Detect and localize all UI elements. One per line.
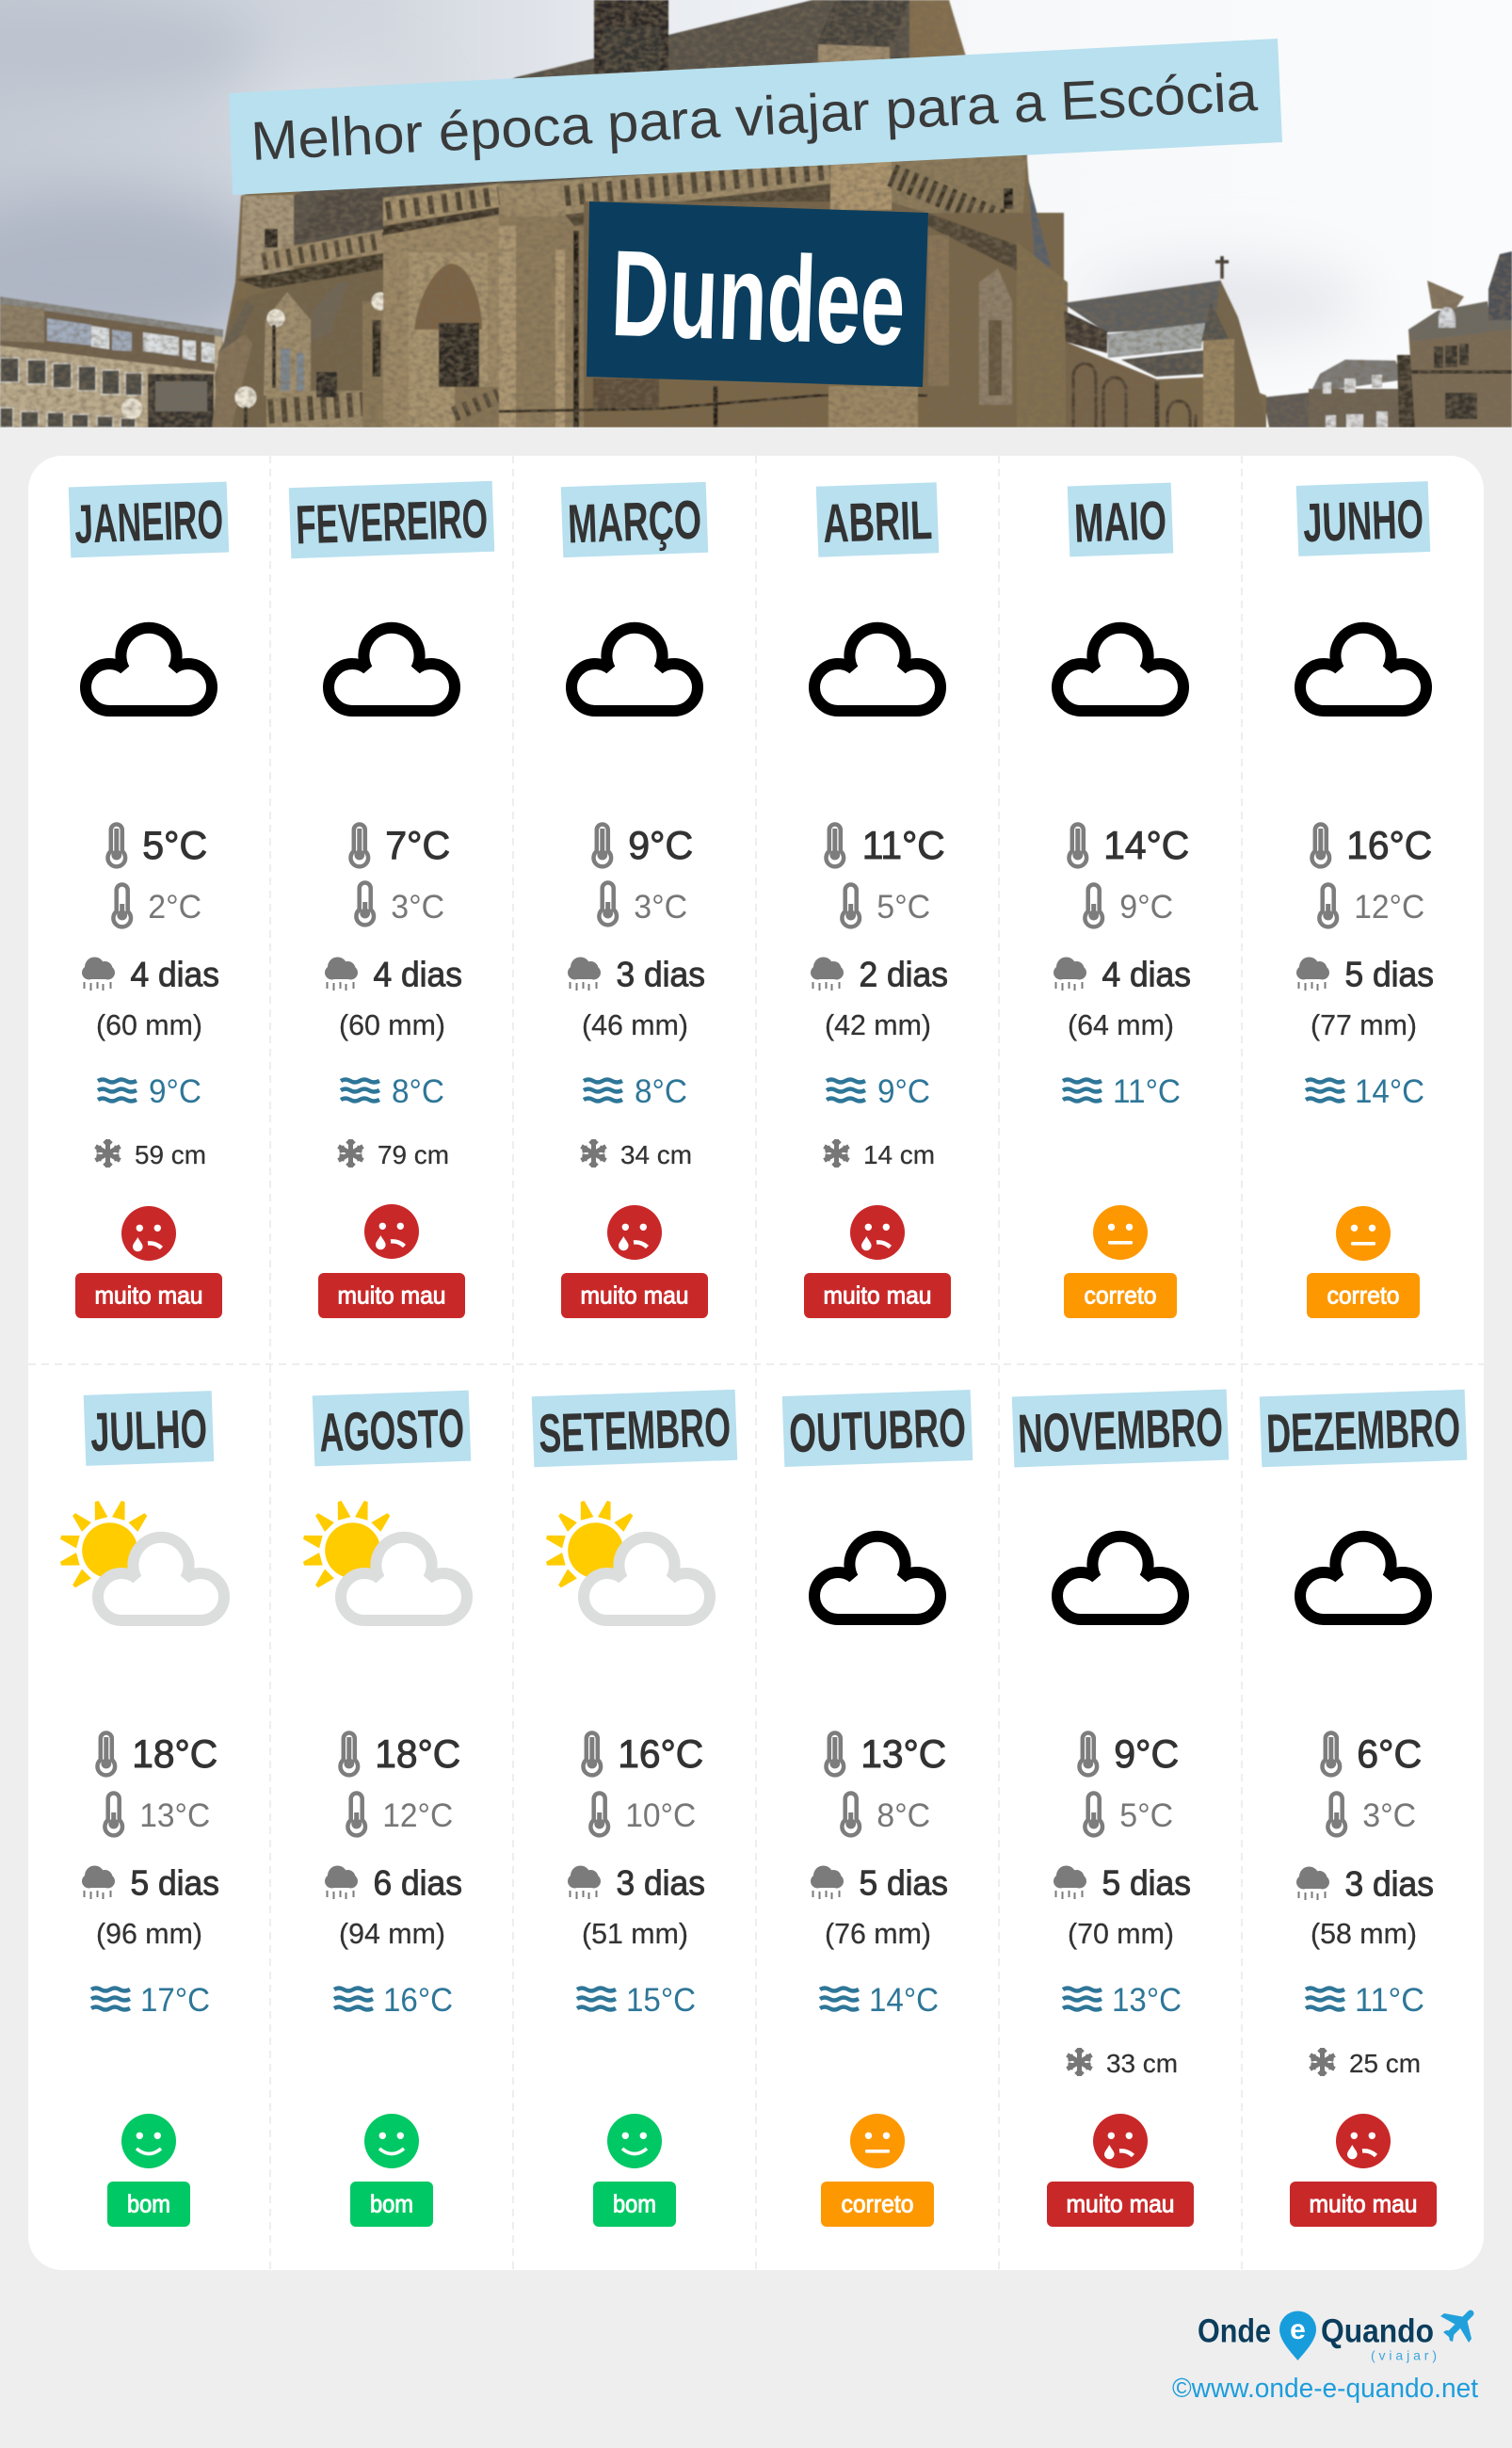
- rainfall: (76 mm): [825, 1917, 931, 1950]
- logo: Onde e Quando: Onde: [1198, 2312, 1271, 2350]
- high temperature: [1312, 823, 1432, 867]
- panel: dezembro: [1260, 1390, 1467, 2227]
- rain days: [1296, 1865, 1434, 1904]
- month label: FEVEREIRO: [295, 488, 489, 556]
- rating badge: [1064, 1273, 1177, 1318]
- month label: JUNHO: [1302, 489, 1424, 554]
- rating face: [850, 2114, 905, 2168]
- panel: janeiro: [69, 482, 229, 1318]
- rating badge: muito mau: [580, 1280, 689, 1309]
- rating face: [1336, 2114, 1391, 2168]
- panel: março: [561, 482, 708, 1318]
- city name box: Dundee: [587, 201, 928, 387]
- sea temperature: [1306, 1982, 1424, 2019]
- month label: [313, 1391, 471, 1466]
- month label: ABRIL: [822, 490, 933, 555]
- icon: map pin: e: [1290, 2314, 1306, 2345]
- high temperature: 14°C: [1103, 823, 1189, 867]
- sea temperature: [1063, 1982, 1182, 2019]
- website credit: ©www.onde-e-quando.net: [1172, 2374, 1478, 2404]
- icon: cloud: [814, 1537, 941, 1619]
- rating badge: [75, 1273, 222, 1318]
- low temperature: 5°C: [877, 889, 930, 926]
- sea temperature: [584, 1073, 687, 1110]
- month label: [1068, 483, 1173, 556]
- logo: Onde e Quando: (viajar): [1371, 2348, 1437, 2363]
- rain days: [1296, 956, 1434, 994]
- high temperature: 18°C: [375, 1731, 460, 1776]
- sea temperature: [1063, 1073, 1181, 1110]
- low temperature: [347, 1793, 453, 1835]
- sea temperature: [91, 1982, 210, 2019]
- rainfall: (42 mm): [825, 1008, 931, 1041]
- snow: 33 cm: [1106, 2049, 1178, 2078]
- rating face: [1093, 2114, 1148, 2168]
- sea temperature: 8°C: [392, 1073, 444, 1110]
- panel: abril: [804, 482, 951, 1318]
- low temperature: [1085, 885, 1173, 926]
- title banner: [229, 39, 1282, 195]
- low temperature: [599, 883, 687, 926]
- city name box: Dundee: Dundee: [609, 224, 908, 371]
- rating face: [1093, 1205, 1148, 1260]
- high temperature: [827, 823, 945, 867]
- high temperature: 18°C: [132, 1731, 217, 1776]
- rating face: [607, 2114, 662, 2168]
- rating badge: correto: [1085, 1280, 1156, 1309]
- low temperature: 9°C: [1119, 889, 1173, 926]
- low temperature: [356, 883, 444, 926]
- snow: 14 cm: [863, 1140, 935, 1169]
- rain days: [82, 956, 219, 994]
- icon: cloud: [86, 628, 212, 711]
- rating badge: muito mau: [94, 1280, 203, 1309]
- rating badge: [1290, 2182, 1437, 2227]
- sea temperature: 9°C: [877, 1073, 930, 1110]
- sea temperature: 8°C: [635, 1073, 687, 1110]
- rating badge: [593, 2182, 676, 2227]
- snow: 34 cm: [620, 1140, 692, 1169]
- sea temperature: 16°C: [383, 1982, 453, 2019]
- low temperature: [842, 885, 930, 926]
- low temperature: 12°C: [382, 1797, 453, 1834]
- rain days: [811, 956, 948, 994]
- low temperature: 12°C: [1354, 889, 1424, 926]
- high temperature: 9°C: [628, 823, 693, 867]
- high temperature: [1322, 1731, 1422, 1776]
- title banner: Melhor época para viajar para a Escócia: [249, 61, 1260, 172]
- sea temperature: 13°C: [1112, 1982, 1182, 2019]
- high temperature: [584, 1731, 703, 1776]
- icon: cloud: [329, 628, 455, 711]
- sea temperature: [334, 1982, 453, 2019]
- month label: [532, 1390, 737, 1467]
- snow: [339, 1139, 449, 1169]
- month label: [1296, 481, 1430, 556]
- rating badge: muito mau: [823, 1280, 932, 1309]
- icon: map pin: [1279, 2311, 1316, 2360]
- month label: [1012, 1390, 1229, 1467]
- rain days: 3 dias: [616, 956, 705, 994]
- rating badge: [107, 2182, 190, 2227]
- rain days: [1054, 1864, 1191, 1903]
- icon: cloud: [571, 628, 698, 711]
- header photo: Dundee building: [0, 0, 1512, 427]
- rainfall: (58 mm): [1311, 1917, 1417, 1950]
- rainfall: (51 mm): [582, 1917, 688, 1950]
- sea temperature: 11°C: [1355, 1982, 1424, 2019]
- rain days: 5 dias: [1344, 956, 1434, 994]
- low temperature: [105, 1793, 210, 1835]
- rating badge: [561, 1273, 708, 1318]
- panel: fevereiro: [289, 481, 494, 1318]
- high temperature: 16°C: [1346, 823, 1432, 867]
- sea temperature: 9°C: [149, 1073, 201, 1110]
- rain days: [568, 956, 705, 994]
- high temperature: 6°C: [1357, 1731, 1422, 1776]
- sea temperature: [820, 1982, 939, 2019]
- icon: sun and cloud: [302, 1500, 467, 1620]
- rating badge: [804, 1273, 951, 1318]
- month label: [84, 1391, 214, 1466]
- low temperature: 2°C: [148, 889, 201, 926]
- rating badge: correto: [1327, 1280, 1399, 1309]
- low temperature: 5°C: [1119, 1797, 1173, 1834]
- logo: Onde e Quando: Quando: [1321, 2312, 1434, 2350]
- rating face: [364, 2114, 419, 2168]
- rainfall: (60 mm): [339, 1008, 445, 1041]
- icon: cloud: [1057, 1537, 1183, 1619]
- low temperature: 10°C: [625, 1797, 696, 1834]
- white card panel: [28, 456, 1484, 2270]
- sea temperature: 14°C: [869, 1982, 939, 2019]
- panel: agosto: [302, 1391, 471, 2227]
- rain days: 2 dias: [859, 956, 948, 994]
- rating badge: [1047, 2182, 1194, 2227]
- low temperature: [590, 1793, 696, 1835]
- snow: [582, 1139, 692, 1169]
- panel: novembro: [1012, 1390, 1229, 2227]
- rainfall: (96 mm): [96, 1917, 202, 1950]
- low temperature: [1319, 885, 1424, 926]
- high temperature: [341, 1731, 460, 1776]
- rating badge: muito mau: [1309, 2190, 1418, 2218]
- rain days: [82, 1864, 219, 1903]
- month label: MARÇO: [567, 490, 702, 555]
- rain days: [325, 956, 462, 994]
- month label: NOVEMBRO: [1017, 1396, 1224, 1465]
- month label: [289, 481, 494, 558]
- sea temperature: 11°C: [1113, 1073, 1181, 1110]
- rating face: [121, 2114, 176, 2168]
- low temperature: 13°C: [139, 1797, 210, 1834]
- rating face: [1336, 1206, 1391, 1261]
- rating badge: muito mau: [1066, 2190, 1175, 2218]
- sea temperature: [1306, 1073, 1424, 1110]
- rating badge: bom: [613, 2190, 656, 2218]
- snow: 59 cm: [135, 1140, 206, 1169]
- icon: cloud: [1057, 628, 1183, 711]
- snow: [825, 1139, 935, 1169]
- panel: julho: [59, 1391, 224, 2227]
- sea temperature: [341, 1073, 444, 1110]
- rain days: [325, 1864, 462, 1903]
- high temperature: 13°C: [861, 1731, 946, 1776]
- rating face: [850, 1205, 905, 1260]
- rating face: [607, 1205, 662, 1260]
- rain days: 4 dias: [373, 956, 462, 994]
- rain days: 4 dias: [130, 956, 219, 994]
- rainfall: (46 mm): [582, 1008, 688, 1041]
- month label: JULHO: [89, 1398, 208, 1463]
- rating badge: bom: [370, 2190, 413, 2218]
- rain days: [568, 1864, 705, 1903]
- rain days: 5 dias: [1102, 1864, 1191, 1903]
- high temperature: [1079, 1731, 1179, 1776]
- month label: [561, 482, 708, 557]
- panel: setembro: [532, 1390, 737, 2227]
- rating badge: muito mau: [337, 1280, 446, 1309]
- rain days: [1054, 956, 1191, 994]
- sea temperature: [98, 1073, 201, 1110]
- sea temperature: [577, 1982, 696, 2019]
- rain days: 4 dias: [1102, 956, 1191, 994]
- icon: sun and cloud: [545, 1500, 710, 1620]
- month label: [816, 482, 939, 557]
- snow: 25 cm: [1349, 2049, 1421, 2078]
- month label: JANEIRO: [73, 489, 224, 556]
- rain days: 5 dias: [130, 1864, 219, 1903]
- icon: cloud: [1300, 1537, 1426, 1619]
- logo: Onde e Quando: [1198, 2311, 1472, 2363]
- month label: OUTUBRO: [788, 1397, 967, 1464]
- rain days: 5 dias: [859, 1864, 948, 1903]
- rainfall: (77 mm): [1311, 1008, 1417, 1041]
- rating face: [121, 1206, 176, 1261]
- rating face: [364, 1204, 419, 1259]
- low temperature: [1327, 1793, 1416, 1835]
- high temperature: [107, 823, 207, 867]
- sea temperature: 15°C: [626, 1982, 696, 2019]
- rating badge: [350, 2182, 433, 2227]
- icon: plane: [1440, 2313, 1472, 2343]
- month label: [782, 1390, 973, 1467]
- high temperature: 7°C: [385, 823, 450, 867]
- rating badge: [1307, 1273, 1420, 1318]
- snow: [96, 1139, 206, 1169]
- rating badge: bom: [127, 2190, 170, 2218]
- low temperature: [842, 1793, 930, 1835]
- sea temperature: [827, 1073, 930, 1110]
- panel: maio: [1054, 483, 1191, 1318]
- month label: MAIO: [1073, 490, 1167, 555]
- rain days: [811, 1864, 948, 1903]
- rainfall: (94 mm): [339, 1917, 445, 1950]
- sea temperature: 17°C: [140, 1982, 210, 2019]
- high temperature: [1070, 823, 1189, 867]
- high temperature: [593, 823, 693, 867]
- rating badge: [318, 1273, 465, 1318]
- high temperature: [827, 1731, 946, 1776]
- panel: outubro: [782, 1390, 973, 2227]
- high temperature: 9°C: [1114, 1731, 1179, 1776]
- high temperature: 16°C: [618, 1731, 703, 1776]
- high temperature: [350, 823, 450, 867]
- rainfall: (70 mm): [1068, 1917, 1174, 1950]
- rainfall: (60 mm): [96, 1008, 202, 1041]
- rain days: 6 dias: [373, 1864, 462, 1903]
- panel: junho: [1296, 481, 1434, 1318]
- icon: sun and cloud: [59, 1500, 224, 1620]
- low temperature: [1085, 1793, 1173, 1835]
- snow: 79 cm: [378, 1140, 449, 1169]
- high temperature: 5°C: [142, 823, 207, 867]
- rain days: 3 dias: [1344, 1865, 1434, 1904]
- icon: cloud: [1300, 628, 1426, 711]
- low temperature: 3°C: [391, 889, 444, 926]
- low temperature: [113, 885, 201, 926]
- sea temperature: 14°C: [1355, 1073, 1424, 1110]
- snow: [1068, 2048, 1178, 2078]
- icon: cloud: [814, 628, 941, 711]
- rainfall: (64 mm): [1068, 1008, 1174, 1041]
- low temperature: 3°C: [634, 889, 687, 926]
- month label: AGOSTO: [318, 1397, 465, 1464]
- rating badge: correto: [842, 2190, 913, 2218]
- low temperature: 8°C: [877, 1797, 930, 1834]
- rating badge: [821, 2182, 934, 2227]
- high temperature: [98, 1731, 217, 1776]
- month label: [69, 482, 229, 557]
- high temperature: 11°C: [862, 823, 945, 867]
- rain days: 3 dias: [616, 1864, 705, 1903]
- low temperature: 3°C: [1362, 1797, 1416, 1834]
- snow: [1311, 2048, 1421, 2078]
- month label: SETEMBRO: [538, 1396, 732, 1465]
